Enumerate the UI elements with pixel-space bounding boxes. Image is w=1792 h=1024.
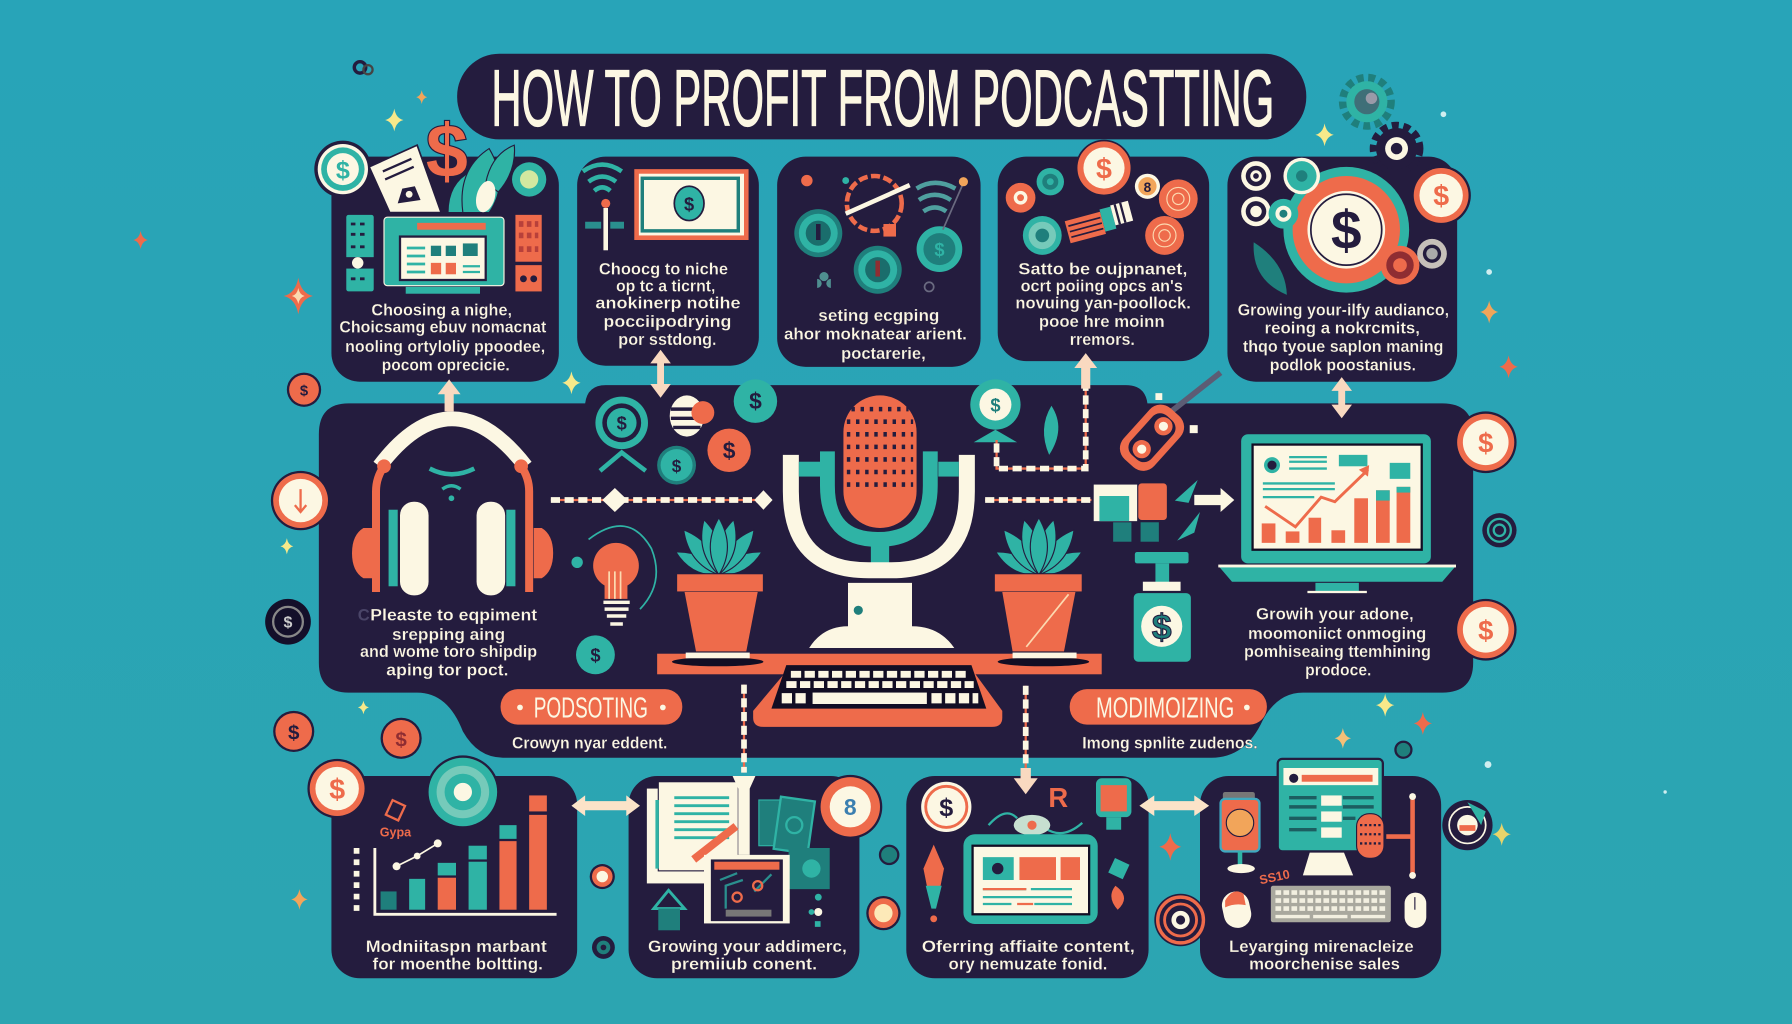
- icon: striped coin: [1154, 894, 1207, 946]
- icon: desktop monitor: [1278, 759, 1383, 875]
- text: bottom card four: [1229, 937, 1414, 974]
- text: bottom card three: ory nemuzate fonid.: [949, 955, 1107, 974]
- text: podsoting caption: Crowyn nyar eddent.: [512, 734, 667, 753]
- icon: bottle with dollar: $: [1152, 607, 1172, 647]
- icon: green coin: $: [336, 156, 350, 184]
- text: growth: [1244, 604, 1431, 679]
- panel: central podcast studio: [319, 368, 1473, 758]
- icon: large dollar coin: $: [1331, 199, 1362, 261]
- text: card four: ocrt poiing opcs an's: [1021, 276, 1183, 295]
- text: card one: Choicsamg ebuv nomacnat: [339, 318, 547, 337]
- icon: book and pen: [647, 782, 738, 883]
- text: card two: por sstdong.: [618, 330, 717, 349]
- text: card three: seting ecgping: [818, 306, 939, 325]
- arrow: bottom cards three and four: [1139, 795, 1209, 816]
- bar chart: Gypa: [380, 826, 412, 840]
- text: equipment: aping tor poct.: [386, 660, 509, 679]
- panel: bottom card one: [307, 755, 577, 978]
- arrow: card four head: [1074, 353, 1097, 389]
- arrow: dashed down to bottom card three: [1014, 686, 1038, 794]
- icon: coin stand: $: [990, 394, 1001, 415]
- icon: paper document: [369, 145, 441, 213]
- arrow: dashed down to bottom card two: [733, 685, 755, 855]
- icon: side figures: [923, 845, 1129, 922]
- text: equipment: and wome toro shipdip: [360, 642, 537, 661]
- icon: coral coin: [307, 759, 367, 818]
- icon: signal: [917, 177, 968, 291]
- text: card four: rremors.: [1070, 330, 1135, 349]
- panel: card two: [577, 157, 759, 366]
- icon: small left coins: $: [288, 721, 300, 744]
- panel: card five: [1227, 157, 1471, 382]
- text: equipment: Pleaste to eqpiment: [370, 606, 538, 625]
- text: bottom card four: Leyarging mirenacleize: [1229, 937, 1414, 956]
- text: bottom card two: premiiub conent.: [671, 955, 817, 974]
- text: card three: ahor moknatear arient.: [784, 324, 967, 343]
- icon: coral coin: 8: [844, 794, 857, 820]
- text: card one: [339, 300, 547, 374]
- icon: headphones: [352, 419, 553, 595]
- arrow: dashed left: [551, 488, 773, 512]
- icon: brush: [1064, 201, 1135, 243]
- icon: speaker device: [1221, 792, 1259, 873]
- arrow: card two double: [650, 350, 671, 398]
- icon: right coral coins: [1455, 411, 1517, 661]
- text: card one: pocom oprecicie.: [382, 355, 510, 374]
- icon: circuit picture: [704, 855, 790, 923]
- text: growth: pomhiseaing ttemhining: [1244, 642, 1431, 661]
- icon: dark gear: [1374, 126, 1419, 171]
- panel: bottom card three: [906, 776, 1149, 978]
- icon: small left coins: $: [300, 383, 309, 399]
- arrow: headphones to card one: [438, 379, 461, 411]
- icon: website monitor: [343, 215, 542, 294]
- text: equipment: C: [358, 606, 370, 625]
- text: bottom card two: [648, 937, 847, 974]
- icon: small left coins: [265, 373, 422, 759]
- text: card one: nooling ortyloliy ppoodee,: [345, 337, 545, 356]
- icon: side coins: [1241, 158, 1471, 295]
- icon: coin cluster: $: [672, 456, 682, 476]
- icon: small tablet: [1048, 778, 1131, 830]
- text: card two: anokinerp notihe: [595, 294, 741, 313]
- icon: dollar coin: [921, 782, 971, 832]
- text: modimoizing caption: Imong spnlite zudenos.: [1082, 734, 1258, 753]
- icon: coins group: 8: [1144, 180, 1152, 195]
- icon: coins group: [1006, 141, 1198, 255]
- text: card five: reoing a nokrcmits,: [1265, 319, 1420, 338]
- text: card four: pooe hre moinn: [1039, 312, 1165, 331]
- icon: right coral coins: $: [1478, 615, 1493, 646]
- icon: green leaves: [448, 145, 515, 214]
- text: card four: [1015, 259, 1191, 349]
- icon: tuning wheel: [801, 175, 910, 237]
- text: bottom card two: Growing your addimerc,: [648, 937, 847, 956]
- icon: small left coins: $: [284, 614, 293, 631]
- icon: keyboard and mice: SS10: [1258, 867, 1291, 887]
- background sparkles and dots: [133, 62, 1667, 910]
- icon: right plant: [993, 517, 1085, 651]
- icon: laptop with growth chart: [1218, 434, 1456, 593]
- badge: modimoizing: MODIMOIZING: [1096, 693, 1234, 725]
- text: card four: novuing yan-poollock.: [1015, 294, 1191, 313]
- icon: light bulb: [571, 526, 656, 674]
- icon: teal gear: [1343, 78, 1391, 126]
- icon: keyboard and mice: [1219, 867, 1426, 930]
- text: bottom card three: [922, 937, 1135, 974]
- text: growth: prodoce.: [1305, 660, 1371, 679]
- arrow: dashed route to card four: [997, 368, 1086, 469]
- arrow: bottom cards one and two: [571, 795, 640, 816]
- text: card five: thqo tyoue saplon maning: [1243, 337, 1443, 356]
- icon: bottle with dollar: [1134, 552, 1191, 662]
- text: card one: Choosing a nighe,: [371, 300, 512, 319]
- icon: left coral coin: [271, 471, 330, 530]
- panel: card three: [777, 157, 981, 367]
- badge: podsoting: [501, 689, 682, 725]
- icon: walkie recorder: [1114, 373, 1221, 477]
- icon: teal coin: [426, 755, 499, 829]
- text: growth: Growih your adone,: [1256, 604, 1414, 623]
- icon: dark ring coin: [1442, 800, 1493, 850]
- icon: left plant: [673, 517, 765, 651]
- text: card two: pocciipodrying: [603, 312, 731, 331]
- text: bottom card four: moorchenise sales: [1249, 955, 1400, 974]
- icon: coral coin: $: [329, 774, 345, 806]
- icon: microphone: [791, 395, 967, 648]
- icon: house and dots: [654, 890, 822, 930]
- text: card four: Satto be oujpnanet,: [1018, 259, 1187, 278]
- arrow: dashed right with camera: [985, 480, 1234, 542]
- icon: cash stack: [759, 797, 830, 889]
- icon: coin cluster: $: [723, 437, 736, 463]
- icon: dial tokens: $: [934, 239, 945, 260]
- text: equipment: srepping aing: [392, 625, 505, 644]
- text: bottom card one: Modniitaspn marbant: [366, 937, 547, 956]
- icon: light bulb: $: [590, 645, 601, 666]
- icon: small bottom coins: [590, 846, 901, 959]
- panel: card one: [314, 109, 559, 382]
- panel: card four: [998, 141, 1209, 361]
- bar chart: [357, 795, 557, 917]
- icon: coins group: $: [1096, 153, 1112, 185]
- panel: bottom card four: [1200, 759, 1441, 978]
- icon: banknote: [634, 169, 749, 240]
- text: card two: [595, 259, 741, 349]
- icon: banknote: $: [684, 193, 694, 214]
- icon: large dollar coin: [1283, 167, 1409, 293]
- badge: modimoizing: [1070, 689, 1267, 725]
- icon: tablet screen: [963, 813, 1098, 924]
- text: card two: op tc a ticrnt,: [616, 276, 715, 295]
- panel: bottom card two: [629, 775, 882, 978]
- text: bottom card one: [366, 937, 547, 974]
- icon: desk shelf and keyboard: [657, 653, 1102, 727]
- icon: coin cluster: [595, 379, 777, 485]
- text: bottom card three: Oferring affiaite content,: [922, 937, 1135, 956]
- text: card five: [1238, 300, 1449, 374]
- icon: coin cluster: $: [749, 388, 762, 414]
- arrow: card five double: [1331, 377, 1352, 418]
- icon: small left coins: $: [395, 728, 407, 751]
- icon: coral coin: [818, 775, 882, 839]
- icon: small tablet: R: [1048, 782, 1068, 813]
- text: bottom card one: for moenthe boltting.: [373, 955, 543, 974]
- icon: small green token: [512, 162, 546, 197]
- icon: dollar sign: $: [426, 109, 468, 193]
- text: card two: Choocg to niche: [599, 259, 728, 278]
- icon: side coins: $: [1433, 181, 1449, 213]
- icon: green coin: [314, 141, 371, 198]
- text: card three: [784, 306, 967, 363]
- text: card five: Growing your-ilfy audianco,: [1238, 300, 1449, 319]
- text: card five: podlok poostanius.: [1270, 355, 1416, 374]
- text: equipment: [358, 606, 538, 679]
- title banner: [457, 54, 1306, 143]
- icon: microphone arm: [1357, 793, 1416, 879]
- badge: podsoting: PODSOTING: [534, 693, 648, 725]
- icon: coin stand: [970, 379, 1058, 455]
- text: card three: poctarerie,: [841, 344, 926, 363]
- icon: wifi antenna: [583, 165, 624, 250]
- text: growth: moomoniict onmoging: [1248, 624, 1426, 643]
- icon: dollar coin: $: [939, 794, 953, 822]
- icon: right coral coins: $: [1478, 428, 1493, 459]
- icon: coin cluster: $: [617, 413, 627, 434]
- icon: dial tokens: [794, 209, 962, 294]
